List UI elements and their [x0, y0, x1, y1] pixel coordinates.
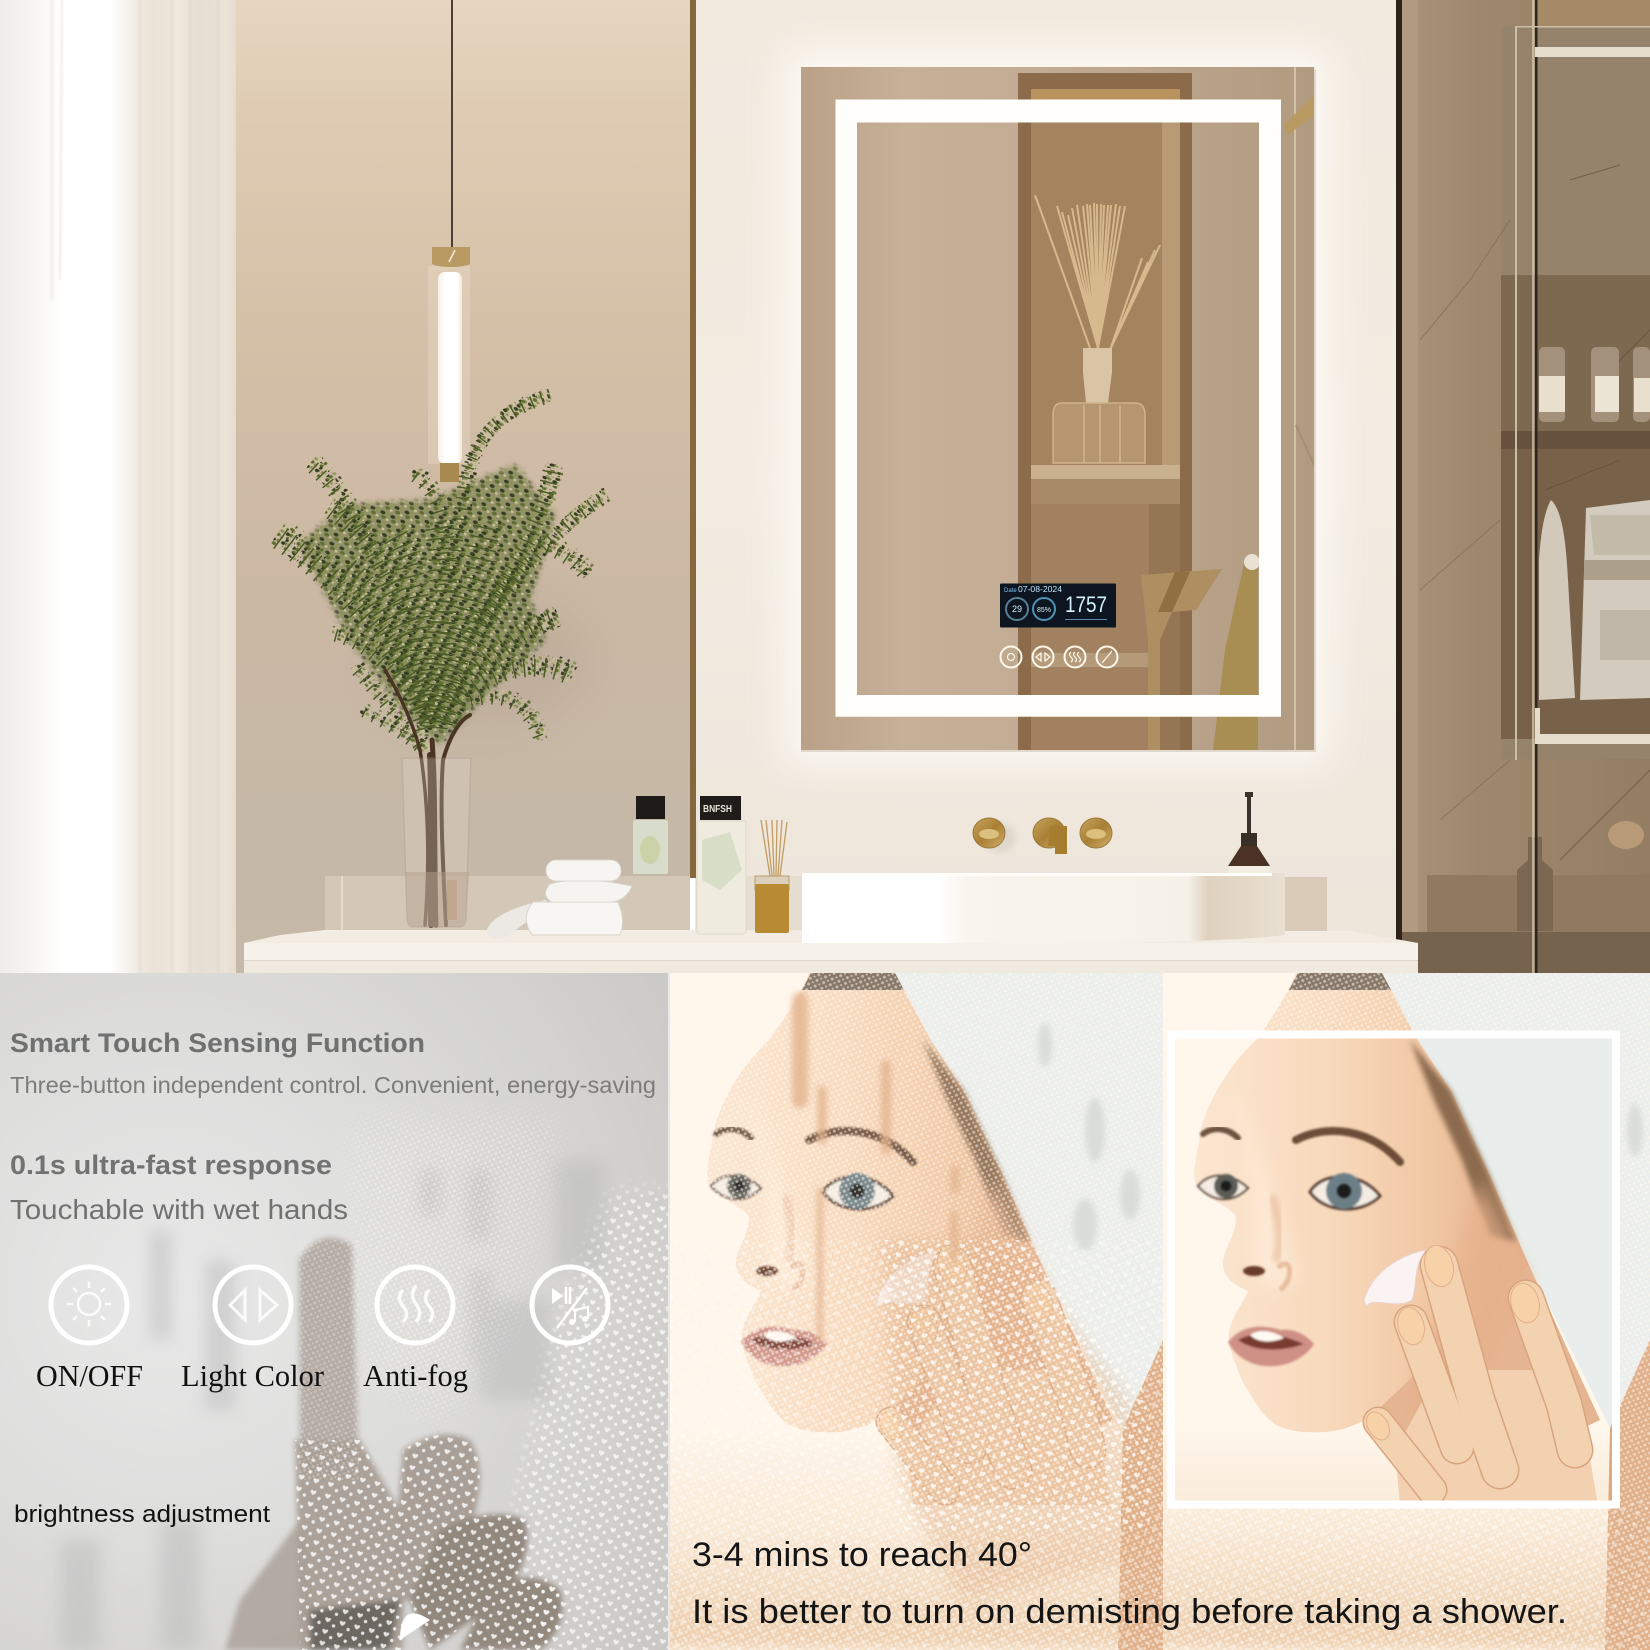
reflected grass vase	[1035, 195, 1160, 463]
clear drip streaks	[800, 1000, 955, 1340]
icon: on/off sun	[51, 1267, 127, 1343]
tall bottle: BNFSH	[703, 804, 732, 815]
label: anti-fog: Anti-fog	[363, 1358, 468, 1393]
fog layer	[670, 973, 1650, 1650]
subheading: wet hands: Touchable with wet hands	[10, 1194, 348, 1225]
backsplash center	[696, 876, 802, 932]
reed diffuser	[755, 820, 789, 933]
smart display	[1000, 584, 1116, 628]
soap dispenser	[1228, 792, 1270, 873]
pendant lamp	[428, 0, 470, 482]
shower shelf bottles	[1539, 347, 1650, 422]
sink basin	[802, 873, 1285, 943]
smart display: 29	[1012, 604, 1022, 614]
main photo: bathroom scene	[0, 0, 1650, 973]
icon: anti-fog	[377, 1267, 453, 1343]
towels	[487, 860, 632, 939]
droplets right side	[480, 1170, 670, 1650]
reflected niche	[1018, 73, 1192, 750]
label: light color: Light Color	[181, 1358, 325, 1393]
plant in vase	[272, 388, 610, 928]
LED frame	[836, 100, 1281, 717]
shower counter box	[1402, 821, 1650, 973]
clear reflection base	[1140, 973, 1650, 1650]
icon: play and music	[532, 1267, 608, 1343]
mirror	[801, 67, 1314, 750]
caption: demist tip: It is better to turn on demisting before taking a shower.	[692, 1593, 1567, 1631]
label: brightness: brightness adjustment	[14, 1501, 270, 1528]
fogged hand tint	[880, 1240, 1150, 1600]
gold wall strip	[690, 0, 696, 878]
vanity counter	[244, 930, 1418, 973]
glass vase	[402, 758, 471, 927]
backsplash left	[325, 876, 690, 935]
heading: smart touch: Smart Touch Sensing Function	[10, 1028, 425, 1058]
condensation streaks	[60, 1160, 605, 1650]
touch buttons	[1000, 646, 1118, 668]
tall bottle	[697, 796, 746, 934]
mirror glow	[785, 50, 1330, 765]
caption: warm-up time: 3-4 mins to reach 40°	[692, 1536, 1032, 1574]
fogged reflection	[653, 973, 1173, 1650]
bottom left panel: smart touch	[0, 973, 670, 1650]
reflected right wall	[1284, 67, 1314, 750]
mirror shadow	[801, 67, 1316, 752]
lit wall	[695, 0, 1397, 973]
smart display: Date	[1004, 588, 1017, 594]
glass door frame	[1515, 0, 1650, 973]
shower room	[1402, 0, 1650, 973]
towel water marks	[1038, 1023, 1643, 1251]
icon: light color	[215, 1267, 291, 1343]
label: on/off: ON/OFF	[36, 1358, 143, 1393]
curtain	[0, 0, 242, 973]
smart display: 85%	[1037, 607, 1051, 614]
panel edge	[668, 973, 670, 1650]
touching hand	[225, 1238, 562, 1650]
smart display: 1757	[1065, 592, 1107, 617]
foggy glass background	[0, 973, 670, 1650]
plant shadow	[478, 623, 570, 711]
foliage	[272, 388, 610, 752]
heading: response: 0.1s ultra-fast response	[10, 1150, 332, 1180]
dark door frame	[1396, 0, 1402, 973]
right backsplash	[1285, 877, 1327, 931]
fog speckle	[300, 1100, 600, 1460]
stems	[385, 670, 470, 925]
beige wall	[236, 0, 690, 973]
clear demist frame	[1171, 1034, 1616, 1504]
subheading: controls: Three-button independent control. Convenient, energy-saving	[10, 1072, 656, 1098]
smart display: 07-08-2024	[1018, 585, 1063, 594]
hanging towels	[1539, 500, 1650, 700]
bottom right panel: demisting before and after	[653, 973, 1650, 1650]
reflected fixtures	[1141, 554, 1260, 750]
small bottle	[633, 796, 668, 874]
wall faucet	[973, 818, 1112, 854]
